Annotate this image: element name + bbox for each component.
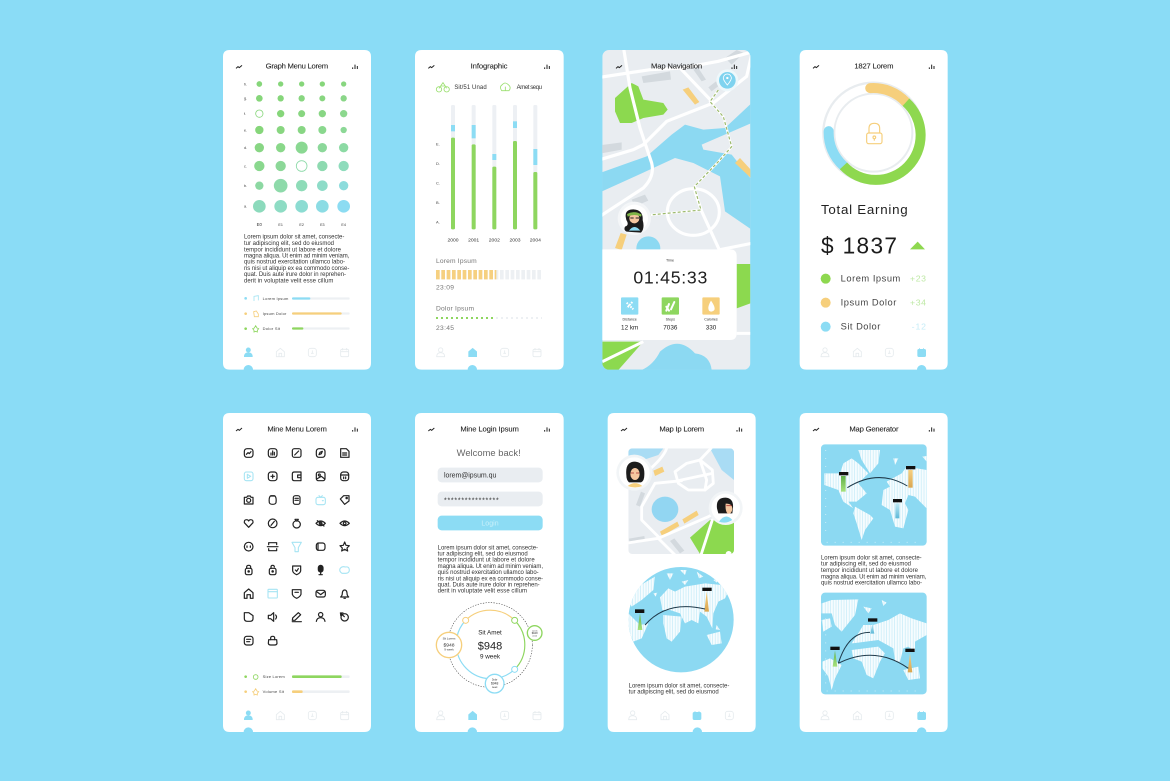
icon: jar [293, 496, 300, 504]
text block: tur adipiscing elit, sed do eiusmod [438, 552, 528, 558]
list row: Lorem Ipsum: +23 [910, 274, 926, 284]
chart year labels: 2002 [489, 238, 500, 244]
chart year labels: 2003 [509, 238, 521, 244]
icon: document [341, 449, 349, 457]
center value: 9 week [480, 654, 501, 661]
stat: distance [621, 297, 638, 331]
icon: trend [428, 428, 434, 431]
icon: trend [813, 428, 819, 431]
progress row: Dolor Sit: Dolor Sit [263, 326, 281, 331]
progress row: Lorem Ipsum: Lorem Ipsum [263, 296, 289, 301]
city map [625, 448, 734, 555]
text block: tempor incididunt ut labore et dolore [244, 247, 342, 253]
text block: quis nostrud exercitation ullamco labo- [438, 570, 539, 576]
timer: 01:45:33: 01:45:33 [633, 268, 708, 288]
avatar: traveller [618, 202, 651, 235]
text block: Lorem ipsum dolor sit amet, consecte- [244, 235, 344, 241]
avatar: woman with dark hair [709, 491, 743, 525]
pin: green [839, 472, 848, 492]
label: Time: Time [666, 258, 674, 262]
icon: plus square [268, 472, 277, 481]
progress row: Size Lorem: Size Lorem [263, 674, 285, 679]
node: bottom: week [492, 687, 498, 689]
center value: Sit Amet [478, 629, 502, 636]
stat: calories: 330 [706, 324, 717, 331]
input: password: **************** [444, 497, 499, 504]
icon: bars [929, 65, 934, 69]
value: 23:09: 23:09 [436, 285, 454, 292]
panel: time summary [602, 249, 737, 340]
chart column labels: E2 [299, 223, 304, 227]
avatar: woman with glasses [616, 455, 652, 491]
pin: yellow [702, 588, 712, 612]
map axis ticks [826, 618, 920, 691]
icon: bottle [269, 496, 276, 504]
stat: steps [662, 297, 679, 331]
icon: ring [293, 519, 300, 528]
icon: trend [621, 428, 627, 431]
chart row labels: h. [244, 82, 247, 86]
icon: note [244, 636, 253, 645]
progress row: Volume Sit [244, 689, 350, 695]
icon: mail [316, 590, 325, 597]
icon: scan [267, 543, 278, 551]
panel: map navigation screen [600, 50, 752, 370]
icon: user [316, 612, 325, 621]
text block [629, 683, 729, 696]
progress row: Volume Sit: Volume Sit [263, 689, 285, 694]
icon: bars [732, 65, 737, 69]
text block: magna aliqua. Ut enim ad minim veniam, [821, 574, 927, 580]
chart axis labels: B. [436, 200, 440, 205]
legend: Amet sequ: Amet sequ [517, 85, 542, 91]
bottom navigation [437, 348, 541, 357]
stat: distance: Distance [623, 318, 637, 322]
node: bottom: Dolor [492, 678, 498, 681]
list row: Sit Dolor [821, 321, 926, 332]
icon: lock [245, 565, 252, 575]
chart year labels [447, 238, 541, 244]
text block: Lorem ipsum dolor sit amet, consecte- [438, 545, 538, 551]
node: right: $948 [532, 631, 538, 635]
chart year labels: 2001 [468, 238, 479, 244]
heading: Mine Login Ipsum: Mine Login Ipsum [460, 425, 519, 434]
text block: tempor incididunt ut labore et dolore [821, 568, 919, 574]
node: right: week [532, 636, 537, 638]
progress row: Lorem Ipsum [244, 296, 350, 301]
panel: graph menu screen [223, 50, 371, 370]
node: bottom [485, 674, 504, 693]
input: email: lorem@ipsum.qu [444, 472, 496, 479]
input: password [438, 492, 543, 506]
icon: wallet [292, 472, 301, 481]
dot matrix chart [253, 81, 350, 213]
icon: star [340, 542, 349, 551]
label: Dolor Ipsum: Dolor Ipsum [436, 305, 474, 312]
pin: yellow [906, 466, 915, 488]
arc routes [838, 632, 908, 668]
card background [415, 413, 564, 732]
icon: bars [545, 65, 549, 69]
text block: Lorem ipsum dolor sit amet, consecte- [821, 555, 922, 561]
text block: tur adipiscing elit, sed do eiusmod [821, 562, 911, 568]
chart column labels: E4 [341, 223, 346, 227]
map illustration [600, 50, 752, 370]
node: left: Sit Lorem [443, 637, 456, 641]
list row: Ipsum Dolor: +34 [910, 298, 926, 308]
stat: steps: 7036 [663, 324, 678, 331]
icon: destination pin [716, 69, 738, 91]
chart row labels [244, 82, 247, 209]
center value [478, 629, 502, 661]
bottom navigation [244, 711, 349, 720]
icon: smile [244, 542, 253, 551]
icon: folder [244, 613, 253, 621]
card background [608, 413, 756, 732]
icon: cloud [500, 83, 510, 91]
icon: bag [268, 636, 277, 645]
list row: Lorem Ipsum: Lorem Ipsum [841, 274, 901, 284]
heading: Map Ip Lorem: Map Ip Lorem [659, 425, 704, 434]
panel: login screen [415, 413, 564, 732]
bottom navigation [437, 711, 541, 720]
node: right [527, 626, 542, 640]
icon: picture [316, 472, 325, 481]
panel: mine menu screen [223, 413, 371, 732]
chart axis labels: E. [436, 142, 440, 147]
stacked bar chart [451, 105, 537, 229]
icon: trend [616, 65, 622, 68]
chart column labels: E0 [257, 222, 263, 227]
text block: tur adipiscing elit, sed do eiusmod [629, 690, 719, 696]
progress row: Size Lorem [244, 674, 350, 679]
pin: green [635, 609, 644, 630]
chart row labels: d. [244, 146, 247, 150]
card background [800, 50, 948, 370]
donut chart [823, 83, 923, 183]
panel: map generator screen [800, 413, 948, 732]
card background [223, 50, 371, 370]
icon: microphone [318, 565, 323, 575]
icon: square [316, 543, 325, 550]
panel: top row, map navigation and earning screens [600, 50, 948, 370]
node: right: Lorem [532, 629, 538, 632]
icon: lock [867, 123, 882, 144]
icon: lock open [269, 565, 276, 575]
map axis ticks [826, 450, 920, 542]
chart column labels: E3 [320, 223, 325, 227]
text block: magna aliqua. Ut enim ad minim veniam, [438, 564, 543, 570]
icon: bars square [268, 449, 277, 457]
icon: eye [340, 521, 349, 526]
world map: top [821, 444, 927, 546]
list row: Ipsum Dolor: Ipsum Dolor [841, 298, 896, 308]
progress row: Ipsum Dolor: Ipsum Dolor [263, 311, 287, 316]
text block [244, 235, 350, 284]
text block: quis nostrud exercitation ullamco labo- [244, 260, 345, 266]
pin: blue [893, 499, 902, 518]
icon: eye hidden [316, 521, 325, 526]
bottom navigation [629, 711, 733, 720]
heading: Map Navigation: Map Navigation [651, 62, 702, 71]
icon: compass [268, 519, 277, 528]
icon: bars [545, 427, 549, 432]
chart axis labels: C. [436, 180, 440, 185]
stat: steps: Steps [666, 318, 675, 322]
icon: shield [292, 590, 301, 598]
card background [415, 50, 564, 370]
node: left: $948 [443, 642, 455, 648]
pin: yellow [905, 649, 915, 672]
node: bottom: $948 [491, 681, 499, 685]
text block: quat. Duis aute irure dolor in reprehen- [438, 582, 540, 588]
text block: derit in voluptate velit esse cillum [438, 589, 527, 595]
card background [800, 413, 948, 732]
icon: bars [929, 427, 934, 432]
icon: calendar [268, 589, 277, 598]
icon grid [244, 449, 349, 645]
pin: blue [868, 618, 877, 634]
progress row: Dolor Sit [244, 326, 350, 332]
icon: archive [341, 472, 349, 481]
text block: derit in voluptate velit esse cillum [244, 278, 333, 284]
text block: quat. Duis aute irure dolor in reprehen- [244, 272, 346, 278]
stat: distance: 12 km [621, 324, 638, 331]
text block: ris nisi ut aliquip ex ea commodo conse- [438, 576, 543, 582]
icon: bulb [292, 542, 301, 552]
heading: Graph Menu Lorem: Graph Menu Lorem [266, 62, 328, 71]
legend: Sit/51 Unad: Sit/51 Unad [454, 85, 487, 91]
heading: Welcome back!: Welcome back! [457, 448, 521, 458]
stat: calories: Calories [704, 318, 718, 322]
icon: note arrow [340, 613, 348, 621]
icon: up arrow [910, 242, 925, 249]
value: 23:45: 23:45 [436, 325, 454, 332]
icon: bell [341, 590, 349, 598]
heading: 1827 Lorem: 1827 Lorem [854, 62, 894, 71]
button: login: Login [481, 520, 499, 527]
chart row labels: f. [244, 112, 246, 116]
panel: map ip screen [608, 413, 756, 732]
heading: Mine Menu Lorem: Mine Menu Lorem [267, 425, 327, 434]
striped progress bar [436, 261, 542, 289]
panel: total earning screen [800, 50, 948, 370]
icon: trend [813, 65, 819, 68]
icon: screen [316, 496, 325, 505]
heading: Map Generator: Map Generator [849, 425, 899, 434]
icon: trend [236, 65, 242, 68]
text block: tur adipiscing elit, sed do eiusmod [244, 241, 334, 247]
list row: Ipsum Dolor [821, 298, 926, 308]
dotted progress bar [436, 315, 542, 321]
chart column labels [257, 222, 346, 227]
icon: compass square [316, 449, 325, 457]
heading: Infographic: Infographic [471, 62, 508, 71]
icon: trend [428, 65, 434, 68]
text block [438, 545, 543, 595]
panel: bottom row, map screens [608, 413, 948, 732]
text block: Lorem ipsum dolor sit amet, consecte- [629, 683, 729, 689]
node: left [436, 632, 462, 658]
icon: bike [436, 83, 449, 92]
icon: play [244, 472, 253, 481]
icon: camera [244, 496, 253, 504]
world map: bottom [821, 593, 927, 694]
progress row: Ipsum Dolor [244, 311, 350, 317]
chart row labels: g. [244, 97, 247, 101]
panel: infographic screen [415, 50, 564, 370]
arc route [847, 478, 907, 488]
node: left: 9 week [444, 648, 454, 652]
pin: green [830, 647, 840, 667]
icon: bars [737, 427, 742, 432]
chart row labels: c. [244, 164, 247, 168]
text block: tempor incididunt ut labore et dolore [438, 558, 535, 564]
bottom navigation [821, 348, 926, 357]
arc route [645, 607, 705, 625]
icon: trend [236, 428, 242, 431]
chart year labels: 2000 [447, 238, 459, 244]
button: login [438, 516, 543, 530]
chart column labels: E1 [278, 223, 283, 227]
icon: tag heart [340, 496, 349, 504]
center value: $948 [478, 640, 502, 652]
list row: Sit Dolor: -12 [912, 321, 926, 331]
text block: quis nostrud exercitation ullamco labo- [821, 581, 922, 587]
chart axis labels: A. [436, 220, 440, 225]
chart row labels: e. [244, 128, 247, 132]
chart row labels: a. [244, 205, 247, 209]
card background [223, 413, 371, 732]
text block: ris nisi ut aliquip ex ea commodo conse- [244, 266, 349, 272]
icon: slash square [292, 449, 301, 457]
icon: bars [353, 427, 357, 432]
route [650, 90, 732, 215]
stat: calories [702, 297, 720, 331]
icon: pencil [292, 613, 301, 622]
list row: Sit Dolor: Sit Dolor [841, 321, 880, 331]
orbit chart [436, 603, 542, 693]
input: email [438, 468, 543, 482]
icon: chart [244, 449, 253, 457]
icon: speaker [268, 613, 276, 621]
chart row labels: b. [244, 184, 247, 188]
chart axis labels [436, 142, 440, 225]
bottom navigation [244, 348, 349, 357]
icon: bars [353, 65, 357, 69]
icon: home [244, 589, 253, 598]
chart year labels: 2004 [530, 238, 541, 244]
globe map [628, 567, 734, 672]
list row: Lorem Ipsum [821, 274, 926, 284]
icon: cloud [340, 567, 349, 573]
icon: heart [244, 520, 253, 527]
panel: top row, graph menu and infographic screens [223, 50, 564, 370]
bottom navigation [821, 711, 926, 720]
label: Lorem Ipsum: Lorem Ipsum [436, 258, 477, 265]
chart axis labels: D. [436, 161, 440, 166]
text block: magna aliqua. Ut enim ad minim veniam, [244, 253, 350, 259]
text block [821, 555, 927, 587]
panel: bottom row, icon menu and login screens [223, 413, 564, 732]
heading: Total Earning: Total Earning [821, 202, 908, 217]
icon: shield check [293, 566, 301, 575]
value: $ 1837: $ 1837 [821, 232, 897, 258]
